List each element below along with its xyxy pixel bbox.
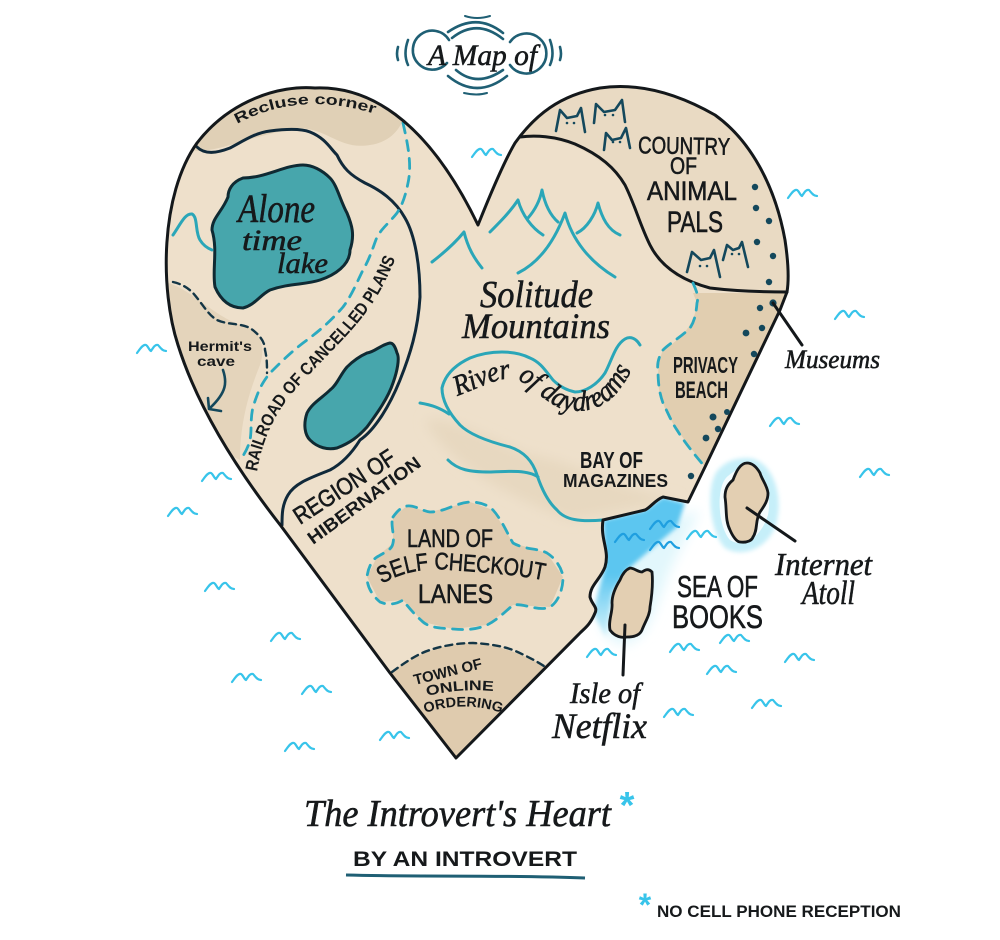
icons: cats	[556, 100, 748, 277]
map labels: Recluse corner	[234, 96, 376, 124]
patch: land of self checkout lanes	[367, 502, 563, 629]
map labels: cave	[197, 353, 235, 369]
outside labels	[551, 345, 880, 746]
lake: Alone time lake	[212, 165, 353, 308]
arrow: into hermit's cave	[208, 370, 225, 411]
railroad of cancelled plans	[240, 123, 410, 460]
map labels: Hermit's	[188, 338, 252, 354]
outside labels: Museums	[784, 345, 880, 374]
map labels: OF	[670, 153, 697, 180]
lake: Alone time lake: lake	[277, 247, 328, 280]
map labels: Mountains	[461, 306, 610, 346]
subheading: by an introvert	[346, 848, 585, 878]
outside labels: BOOKS	[672, 599, 763, 635]
lake: Alone time lake: Alone	[236, 186, 315, 231]
lake: small unnamed lake	[305, 343, 398, 449]
map labels: HIBERNATION	[304, 453, 425, 548]
dashed border: town	[392, 643, 547, 672]
patch: country of animal pals	[515, 80, 800, 292]
dashed border: hermit's cave	[173, 282, 267, 373]
callout lines	[623, 303, 802, 675]
patch: town of online ordering	[392, 643, 544, 756]
map labels: BEACH	[675, 377, 728, 404]
map labels: ONLINE	[426, 680, 494, 695]
river of daydreams	[442, 338, 640, 521]
wave marks	[137, 149, 889, 751]
island: Isle of Netflix	[610, 568, 652, 637]
patch: recluse corner	[194, 89, 402, 151]
subheading: by an introvert: BY AN INTROVERT	[353, 848, 577, 871]
dashed shore: land of lanes	[367, 502, 563, 630]
river: black border around the plains	[197, 129, 420, 525]
outside labels: Atoll	[800, 575, 855, 612]
river: lake outflow	[173, 214, 212, 250]
map labels	[166, 96, 776, 751]
footnote: *	[639, 887, 652, 923]
outside labels: SEA OF	[677, 569, 758, 604]
mountains	[432, 232, 482, 268]
map labels: PRIVACY	[673, 352, 738, 378]
dashed shore: privacy beach	[658, 283, 705, 467]
title banner: A Map of: A Map of	[426, 39, 541, 72]
footnote: NO CELL PHONE RECEPTION	[657, 902, 901, 921]
title banner: A Map of	[397, 16, 561, 94]
map labels: MAGAZINES	[563, 471, 668, 491]
sea: watercolour around the coast	[593, 458, 779, 644]
island: Internet Atoll	[725, 463, 768, 542]
outside labels: Internet	[774, 546, 873, 582]
patch: bay of magazines	[436, 425, 647, 516]
map labels: LANES	[418, 579, 493, 609]
patch: privacy beach	[658, 293, 790, 467]
heart coastline	[166, 87, 788, 758]
border: animal pals	[520, 136, 787, 292]
map labels: BAY OF	[580, 447, 643, 473]
map labels: LAND OF	[407, 525, 493, 553]
map labels: ORDERING	[424, 696, 502, 712]
outside labels: Netflix	[551, 706, 647, 746]
lake: Alone time lake: time	[242, 224, 302, 257]
map labels: REGION OF	[289, 444, 401, 530]
map labels: COUNTRY	[638, 132, 730, 161]
museum dots	[688, 184, 777, 479]
rivers and borders	[173, 123, 787, 672]
map labels: ANIMAL	[647, 176, 737, 206]
map labels: RAILROAD OF CANCELLED PLANS	[245, 256, 394, 471]
heart landmass	[165, 70, 800, 770]
river: south branch	[448, 460, 538, 477]
heading: The Introvert's Heart: The Introvert's Heart	[304, 793, 612, 835]
map labels: TOWN OF	[412, 655, 484, 689]
asterisk: *	[620, 785, 635, 827]
map labels: Solitude	[480, 274, 593, 316]
map labels: PALS	[667, 206, 723, 239]
outside labels: Isle of	[569, 677, 643, 710]
map labels: SELF CHECKOUT	[376, 552, 547, 582]
patch: hermit's cave	[165, 282, 262, 460]
footnote	[639, 887, 901, 923]
map labels: River of daydreams	[452, 364, 630, 415]
river: east branch	[420, 403, 449, 414]
